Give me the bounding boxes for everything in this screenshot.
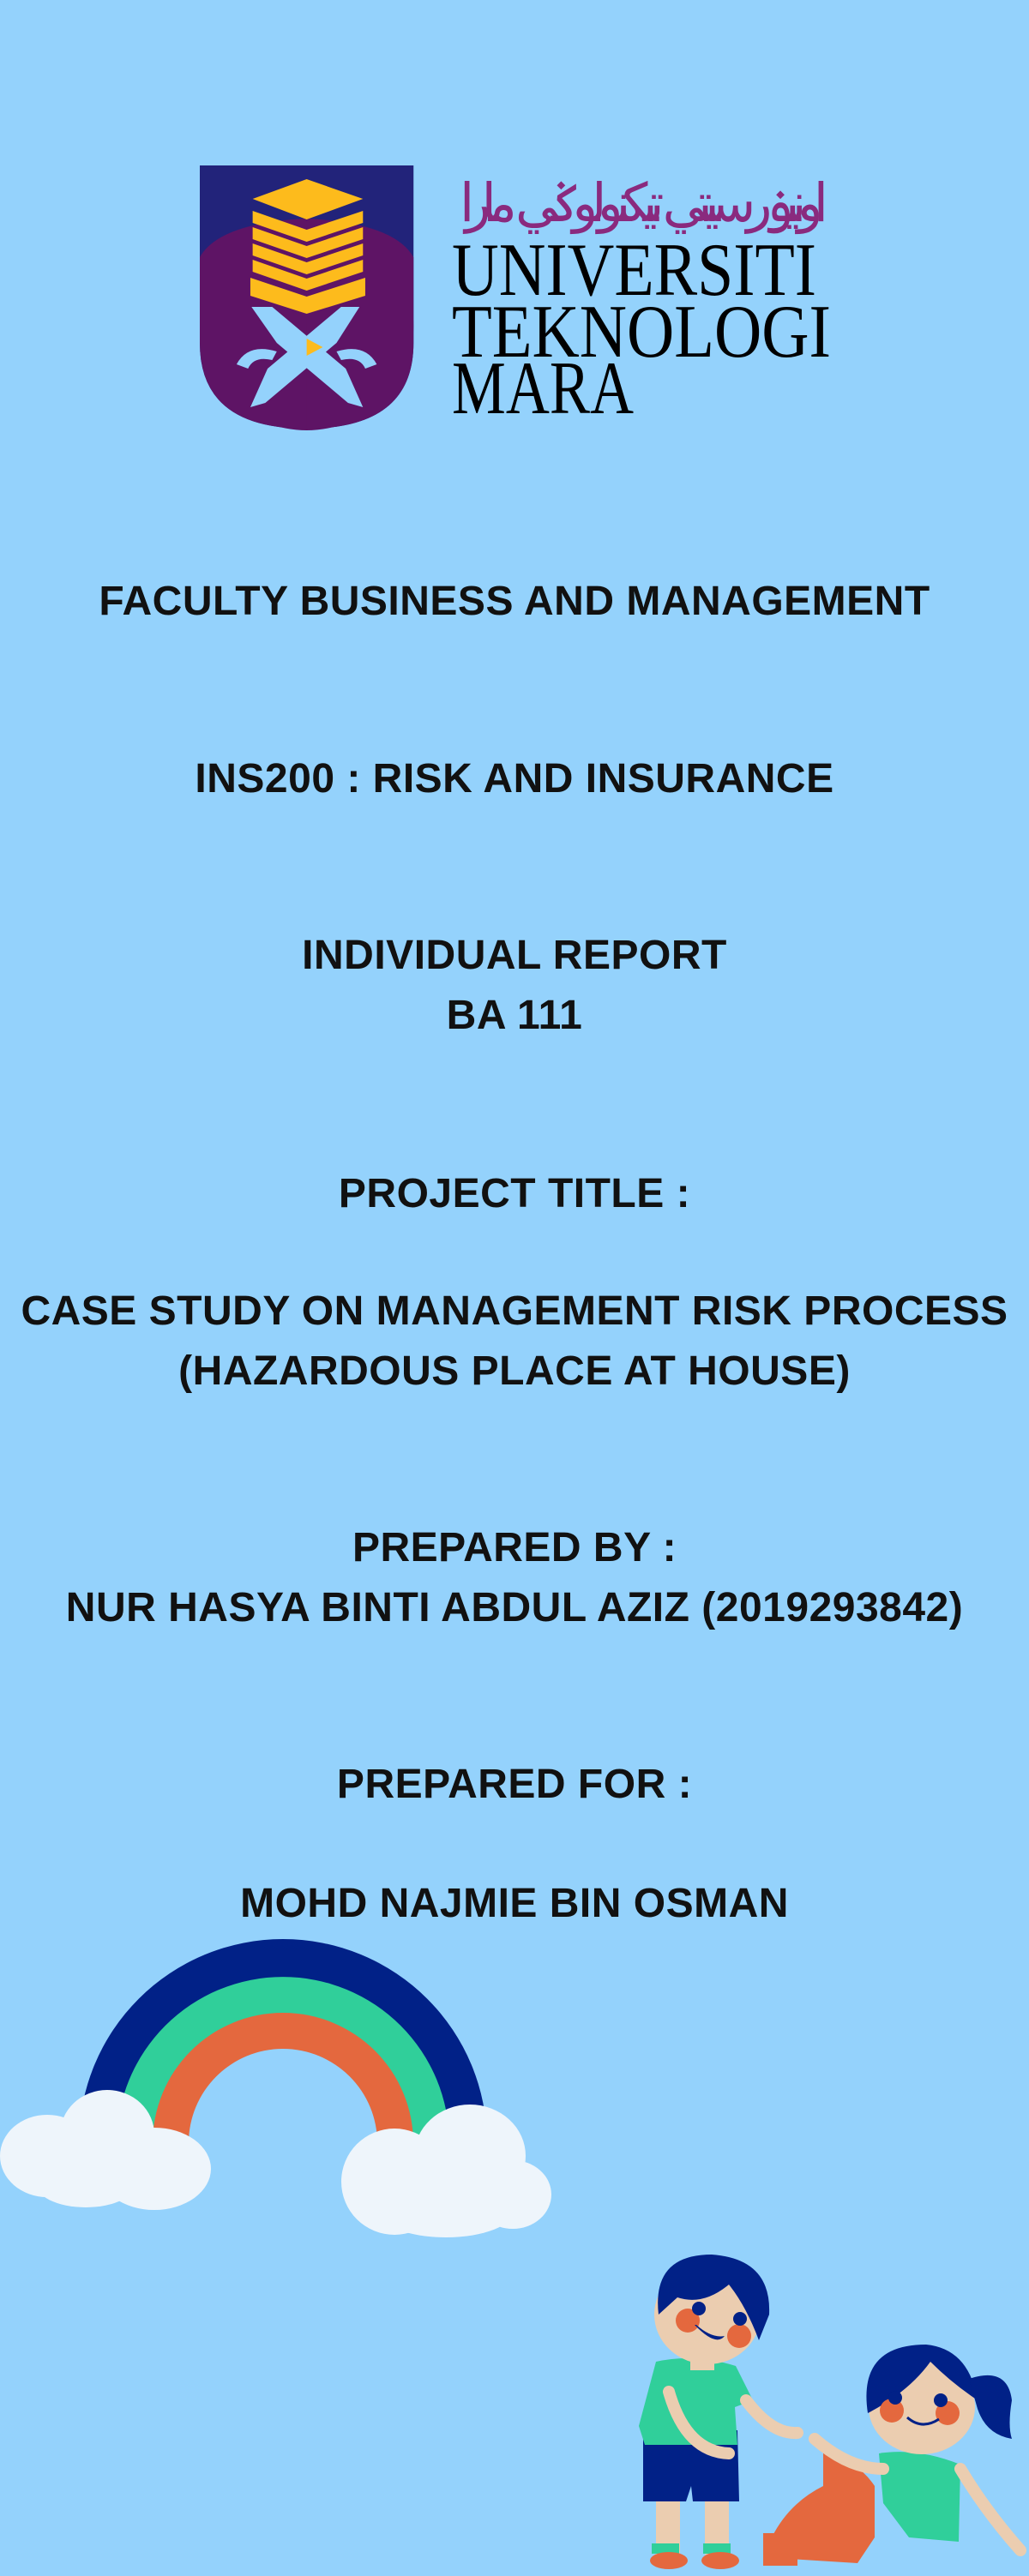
text block: report: BA 111 [447, 993, 582, 1038]
text block: report: INDIVIDUAL REPORT [302, 933, 727, 978]
text block: title: CASE STUDY ON MANAGEMENT RISK PROCESS [21, 1288, 1008, 1334]
heading: faculty: FACULTY BUSINESS AND MANAGEMENT [99, 579, 930, 624]
icon: shield [200, 165, 413, 430]
boy [639, 2255, 797, 2569]
heading: course: INS200 : RISK AND INSURANCE [195, 756, 834, 802]
illustration: children [639, 2255, 1026, 2569]
text block: report [302, 933, 727, 1038]
text block: prepared by [66, 1525, 963, 1630]
text block: prepared by: NUR HASYA BINTI ABDUL AZIZ (2019293842) [66, 1585, 963, 1630]
logo: UiTM [200, 165, 831, 430]
girl [763, 2345, 1020, 2566]
heading: project title: PROJECT TITLE : [339, 1171, 690, 1216]
logo text [452, 229, 831, 430]
heading: prepared for: PREPARED FOR : [337, 1762, 692, 1807]
illustration: rainbow with clouds [0, 1939, 551, 2237]
logo text: MARA [452, 347, 634, 430]
arabic script: اونيۏرسيتي تيکنولوݢي مارا [460, 171, 828, 234]
text block: title [21, 1288, 1008, 1394]
text block: title: (HAZARDOUS PLACE AT HOUSE) [178, 1348, 851, 1394]
cloud left [0, 2090, 211, 2210]
text block: prepared by: PREPARED BY : [352, 1525, 677, 1570]
cloud right [341, 2105, 551, 2237]
text block: lecturer: MOHD NAJMIE BIN OSMAN [240, 1881, 789, 1926]
